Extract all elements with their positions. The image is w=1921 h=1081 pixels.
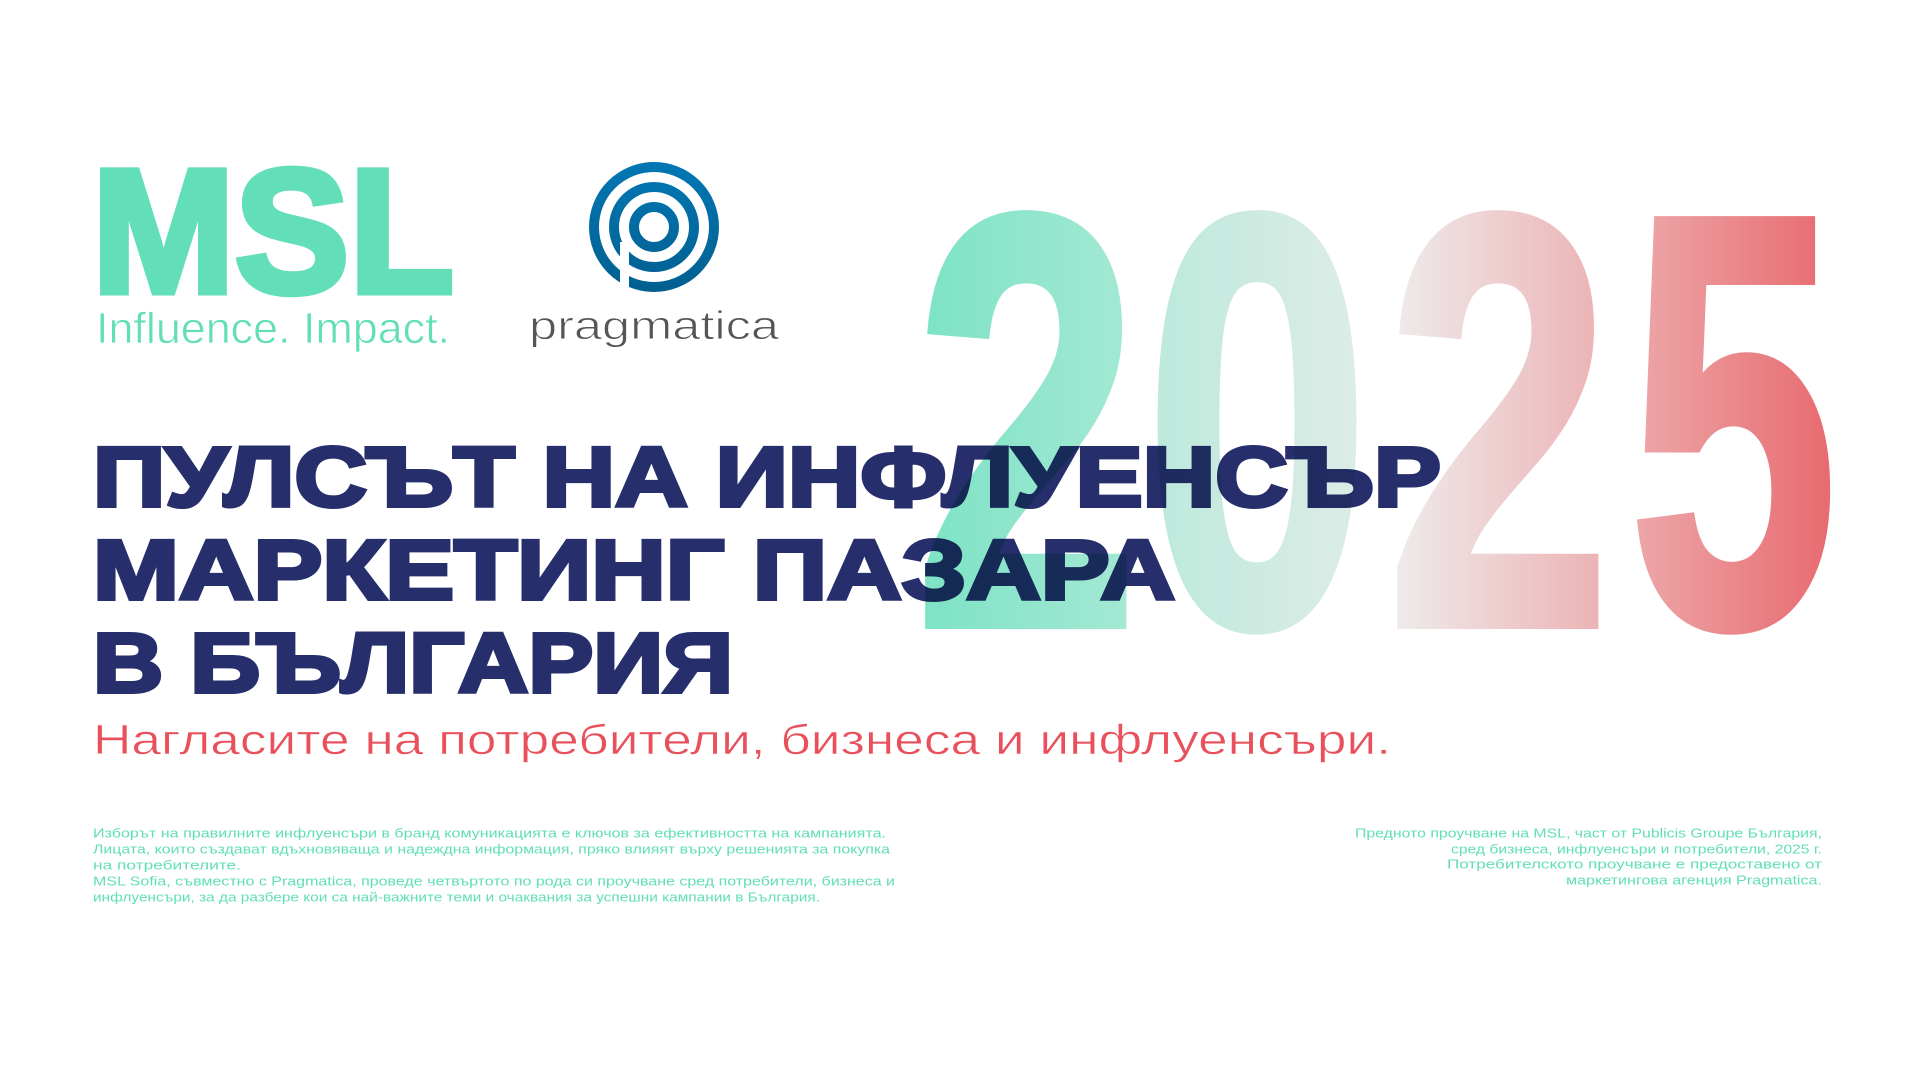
source note: сред бизнеса, инфлуенсъри и потребители, 2025 г. bbox=[1451, 842, 1822, 856]
logo: pragmatica bbox=[529, 167, 780, 348]
logo: MSL bbox=[92, 134, 454, 353]
title: ПУЛСЪТ НА ИНФЛУЕНСЪР bbox=[93, 430, 1441, 524]
source note: Потребителското проучване е предоставено от bbox=[1447, 856, 1822, 872]
MSL tagline: Influence. Impact. bbox=[96, 304, 450, 353]
intro text block: Лицата, които създават вдъхновяваща и надеждна информация, пряко влияят върху решенията за покупка bbox=[93, 842, 891, 856]
intro text block: MSL Sofia, съвместно с Pragmatica, проведе четвъртото по рода си проучване сред потребители, бизнеса и bbox=[93, 874, 895, 888]
title: В БЪЛГАРИЯ bbox=[93, 616, 733, 710]
source note: маркетингова агенция Pragmatica. bbox=[1566, 872, 1822, 888]
source note bbox=[1355, 826, 1822, 888]
intro text block: Изборът на правилните инфлуенсъри в бранд комуникацията е ключов за ефективността на кампанията. bbox=[93, 826, 886, 840]
year 2025 gradient numerals: 5 bbox=[1629, 94, 1838, 750]
source note: Предното проучване на MSL, част от Publicis Groupe България, bbox=[1355, 826, 1822, 840]
subtitle: Нагласите на потребители, бизнеса и инфлуенсъри. bbox=[93, 716, 1391, 763]
title bbox=[93, 430, 1441, 710]
intro text block: на потребителите. bbox=[93, 858, 241, 872]
intro text block bbox=[93, 826, 895, 904]
year 2025 gradient numerals: 202 bbox=[914, 93, 1611, 749]
MSL wordmark: MSL bbox=[92, 134, 454, 330]
icon: pragmatica concentric p bbox=[594, 167, 714, 298]
title: МАРКЕТИНГ ПАЗАРА bbox=[93, 523, 1175, 617]
intro text block: инфлуенсъри, за да разбере кои са най-важните теми и очаквания за успешни кампании в България. bbox=[93, 890, 820, 904]
pragmatica wordmark: pragmatica bbox=[529, 304, 780, 348]
